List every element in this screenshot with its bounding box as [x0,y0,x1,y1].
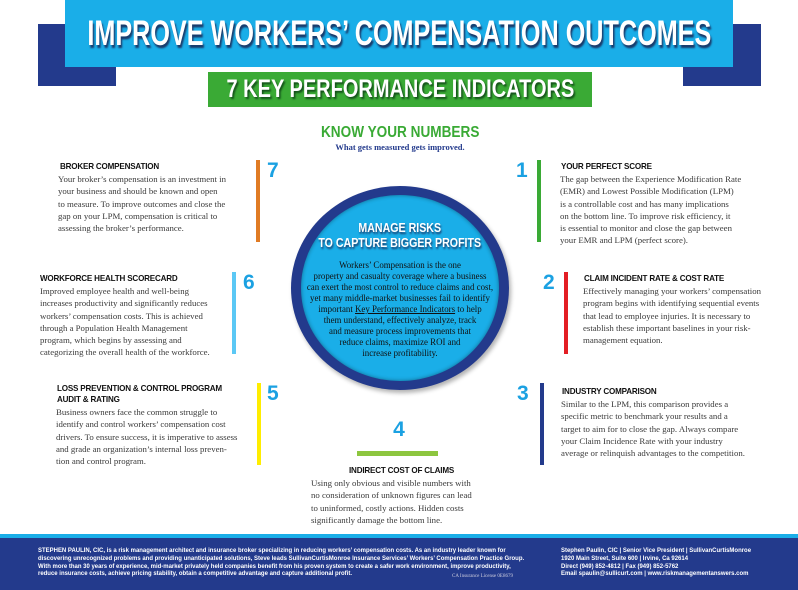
footer: contact: Stephen Paulin, CIC | Senior Vice President | SullivanCurtisMonroe [561,547,751,554]
panel 5: loss prevention: and grade an organization’s internal loss preven- [56,444,227,454]
central circle: property and casualty coverage where a business [314,271,486,281]
panel 7: broker compensation: to measure. To improve outcomes and close the [58,199,225,209]
panel 5: loss prevention: identify and control workers’ compensation cost [56,419,226,429]
title banner [65,0,733,67]
panel 4: indirect cost of claims: no consideration of unknown figures can lead [311,490,472,500]
panel 1: your perfect score: is a controllable cost and has many implications [560,199,729,209]
central circle: TO CAPTURE BIGGER PROFITS [319,236,481,250]
panel 5: loss prevention: 5 [267,382,279,405]
panel 7: broker compensation: your business and should be known and open [58,186,218,196]
central circle: can exert the most control to reduce claims and cost, [307,282,493,292]
footer: contact [561,547,751,577]
central circle: yet many middle-market businesses fail to identify [310,293,490,303]
panel 1: your perfect score: is essential to monitor and close the gap between [560,223,732,233]
heading: know your numbers [321,124,479,152]
panel 6: workforce health scorecard: Improved employee health and well-being [40,286,189,296]
panel 1: your perfect score: on the bottom line. To improve risk efficiency, it [560,211,730,221]
panel 4: indirect cost of claims [311,418,472,525]
panel 5: loss prevention: tion and control program. [56,456,146,466]
panel 2: claim incident rate: that lead to employee injuries. It is necessary to [583,311,750,321]
heading: know your numbers: What gets measured gets improved. [335,142,465,152]
panel 5: loss prevention [56,382,279,466]
footer: license: CA Insurance License 0E8679 [452,574,513,579]
panel 2: claim incident rate [543,271,761,354]
panel 2: claim incident rate: management equation. [583,335,663,345]
panel 6: workforce health scorecard: program, which begins by assessing and [40,335,182,345]
footer: contact: 1920 Main Street, Suite 600 | Irvine, Ca 92614 [561,555,688,562]
panel 6: workforce health scorecard: WORKFORCE HEALTH SCORECARD [40,273,178,283]
panel 5: loss prevention: drivers. To ensure success, it is imperative to assess [56,432,237,442]
panel 7: broker compensation [58,159,279,242]
panel 3: industry comparison: average or relinquish advantages to the competition. [561,448,745,458]
footer: contact: Direct (949) 852-4812 | Fax (949) 852-5762 [561,563,678,570]
panel 7: broker compensation: BROKER COMPENSATION [60,161,159,171]
footer: bio text: STEPHEN PAULIN, CIC, is a risk management architect and insurance broker specializing in reducing workers’ compensation costs. As an industry leader known for [38,547,506,554]
footer: bio text: With more than 30 years of experience, mid-market privately held companies benefit from his proven system to create a safer work environment, improve productivity, [38,563,511,570]
panel 2: claim incident rate: program begins with identifying sequential events [583,298,759,308]
subtitle banner: 7 KEY PERFORMANCE INDICATORS [226,75,574,103]
header: dark blue right tab [683,24,761,86]
panel 3: industry comparison: target to aim for to close the gap. Always compare [561,424,738,434]
central circle: increase profitability. [362,348,438,358]
panel 2: claim incident rate: establish these important baselines in your risk- [583,323,751,333]
panel 7: broker compensation: assessing the broker’s performance. [58,223,184,233]
panel 5: loss prevention: LOSS PREVENTION & CONTROL PROGRAM [57,383,222,393]
central circle: important Key Performance Indicators to help [318,304,482,314]
panel 1: your perfect score [516,159,741,245]
panel 7: broker compensation: 7 [267,159,279,182]
central circle [291,186,509,390]
heading: know your numbers: KNOW YOUR NUMBERS [321,124,479,141]
panel 6: workforce health scorecard: workers’ compensation costs. This is achieved [40,311,203,321]
panel 1: your perfect score: The gap between the Experience Modification Rate [560,174,741,184]
header: dark blue left tab [38,24,116,86]
panel 1: your perfect score: YOUR PERFECT SCORE [561,161,652,171]
central circle: Workers’ Compensation is the one [339,260,461,270]
central circle: reduce claims, maximize ROI and [340,337,460,347]
footer [0,534,798,590]
panel 3: industry comparison: 3 [517,382,529,405]
panel 3: industry comparison: Similar to the LPM, this comparison provides a [561,399,728,409]
panel 3: industry comparison: your Claim Incidence Rate with your industry [561,436,723,446]
central circle: them understand, effectively analyze, track [324,315,476,325]
panel 3: industry comparison [517,382,745,465]
panel 4: indirect cost of claims: Using only obvious and visible numbers with [311,478,471,488]
panel 7: broker compensation: Your broker’s compensation is an investment in [58,174,226,184]
panel 6: workforce health scorecard [40,271,255,357]
panel 4: indirect cost of claims: significantly damage the bottom line. [311,515,442,525]
panel 6: workforce health scorecard: categorizing the overall health of the workforce. [40,347,210,357]
panel 4: indirect cost of claims: INDIRECT COST OF CLAIMS [349,465,454,475]
footer: bio text: discovering unrecognized problems and providing unanticipated solutions, Steve leads SullivanCurtisMonroe Insurance Services’ Workers’ Compensation Practice Group. [38,555,524,562]
panel 1: your perfect score: 1 [516,159,528,182]
panel 2: claim incident rate: 2 [543,271,555,294]
central circle: and measure process improvements that [329,326,471,336]
footer: bio text [38,547,524,577]
panel 6: workforce health scorecard: 6 [243,271,255,294]
panel 6: workforce health scorecard: increases productivity and significantly reduces [40,298,208,308]
panel 5: loss prevention: AUDIT & RATING [57,394,120,404]
panel 7: broker compensation: gap on your LPM, compensation is critical to [58,211,217,221]
footer: contact: Email spaulin@sullicurt.com | www.riskmanagementanswers.com [561,570,748,577]
panel 1: your perfect score: (EMR) and Lowest Possible Modification (LPM) [560,186,734,196]
panel 2: claim incident rate: Effectively managing your workers’ compensation [583,286,761,296]
footer: bio text: reduce insurance costs, achieve pricing stability, obtain a competitive advantage and capture additional profit. [38,570,352,577]
panel 4: indirect cost of claims: 4 [393,418,405,441]
title banner: IMPROVE WORKERS’ COMPENSATION OUTCOMES [87,14,711,53]
panel 3: industry comparison: specific metric to benchmark your results and a [561,411,728,421]
panel 3: industry comparison: INDUSTRY COMPARISON [562,386,656,396]
panel 5: loss prevention: Business owners face the common struggle to [56,407,217,417]
panel 6: workforce health scorecard: through a Population Health Management [40,323,188,333]
panel 2: claim incident rate: CLAIM INCIDENT RATE & COST RATE [584,273,724,283]
panel 1: your perfect score: your EMR and LPM (perfect score). [560,235,688,245]
central circle: MANAGE RISKS [359,221,441,235]
panel 4: indirect cost of claims: to uninformed, costly actions. Hidden costs [311,503,464,513]
